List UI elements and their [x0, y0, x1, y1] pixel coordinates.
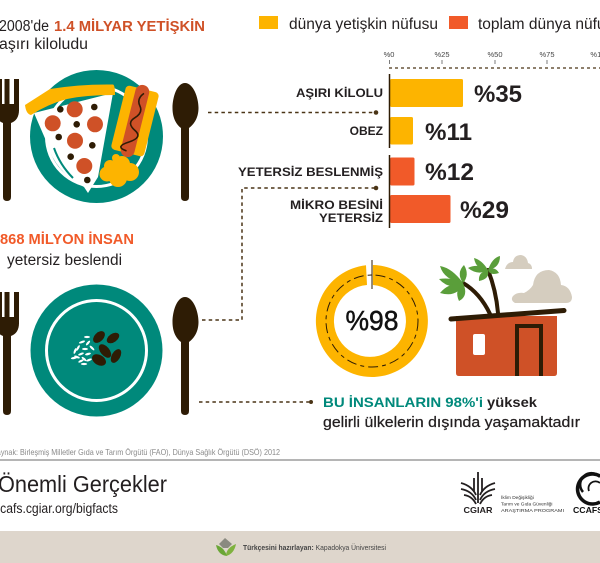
bar: overweight: %35	[474, 81, 522, 108]
food blob	[100, 154, 139, 187]
house body	[456, 316, 557, 376]
chart axis: %0	[384, 50, 394, 59]
logo: CGIAR: CGIAR	[464, 505, 492, 515]
callout text: BU İNSANLARIN 98%'i	[323, 394, 483, 410]
palms	[463, 270, 498, 314]
bar chart	[238, 74, 522, 228]
bar: micronutrient deficient	[290, 195, 509, 225]
program text	[501, 494, 564, 514]
bar: undernourished: %12	[425, 159, 474, 186]
callout text	[323, 394, 580, 431]
logo: university	[216, 538, 236, 556]
heading: overweight: 1.4 MİLYAR YETİŞKİN	[54, 18, 205, 35]
heading: overweight	[0, 18, 205, 53]
icon: spoon bottom	[172, 297, 198, 415]
logo: CCAFS	[573, 473, 600, 515]
pizza slice	[25, 84, 115, 193]
hot dog	[110, 81, 160, 161]
footer title: Önemli Gerçekler	[0, 471, 167, 497]
bar: micronutrient deficient: YETERSİZ	[319, 210, 383, 225]
bar: obese	[350, 117, 472, 146]
program text: Tarım ve Gıda Güvenliği	[501, 502, 552, 508]
chart axis: %25	[434, 50, 450, 59]
icon: house with palms and clouds	[439, 255, 572, 376]
chart axis: %75	[539, 50, 555, 59]
icon: fork top	[0, 79, 19, 201]
heading: undernourished	[0, 231, 134, 269]
arrow: overweight to chart	[208, 110, 378, 115]
credit: Türkçesini hazırlayan: Kapadokya Üniversitesi	[243, 543, 386, 552]
heading: undernourished: 868 MİLYON İNSAN	[0, 231, 134, 248]
callout text: yüksek	[487, 394, 537, 410]
bar: overweight: AŞIRI KİLOLU	[296, 85, 383, 100]
bottom band	[0, 531, 600, 563]
icon: spoon top	[172, 83, 198, 201]
chart axis	[384, 50, 600, 68]
program text: ARAŞTIRMA PROGRAMI	[501, 508, 564, 514]
donut chart 98%	[316, 260, 428, 377]
clouds	[505, 255, 572, 303]
bar: undernourished: YETERSİZ BESLENMİŞ	[238, 164, 383, 179]
legend	[259, 16, 600, 33]
chart axis: %50	[487, 50, 503, 59]
arrow: undernourished to chart	[202, 186, 378, 320]
icon: plate with junk food	[25, 70, 163, 203]
heading: overweight: 2008'de	[0, 18, 49, 35]
heading: overweight: aşırı kiloludu	[0, 36, 88, 53]
icon: fork bottom	[0, 292, 19, 415]
legend: dünya yetişkin nüfusu	[289, 16, 438, 33]
donut chart 98%: %98	[346, 305, 398, 336]
bar: micronutrient deficient: MİKRO BESİNİ	[290, 197, 383, 212]
heading: undernourished: yetersiz beslendi	[7, 252, 122, 269]
bar: obese: OBEZ	[350, 124, 383, 138]
arrow: plate to callout	[199, 400, 313, 404]
callout text: gelirli ülkelerin dışında yaşamaktadır	[323, 414, 580, 431]
program text: İklim Değişikliği	[501, 494, 534, 501]
bar: undernourished	[238, 158, 474, 186]
logo: CGIAR	[461, 472, 495, 515]
icon: plate with rice and beans	[30, 284, 162, 416]
bar: overweight	[296, 79, 522, 108]
footer title	[0, 471, 167, 516]
bar: micronutrient deficient: %29	[460, 197, 509, 224]
bar: obese: %11	[425, 119, 472, 146]
source: Kaynak: Birleşmiş Milletler Gıda ve Tarım Örgütü (FAO), Dünya Sağlık Örgütü (DSÖ) 2012	[0, 447, 280, 457]
